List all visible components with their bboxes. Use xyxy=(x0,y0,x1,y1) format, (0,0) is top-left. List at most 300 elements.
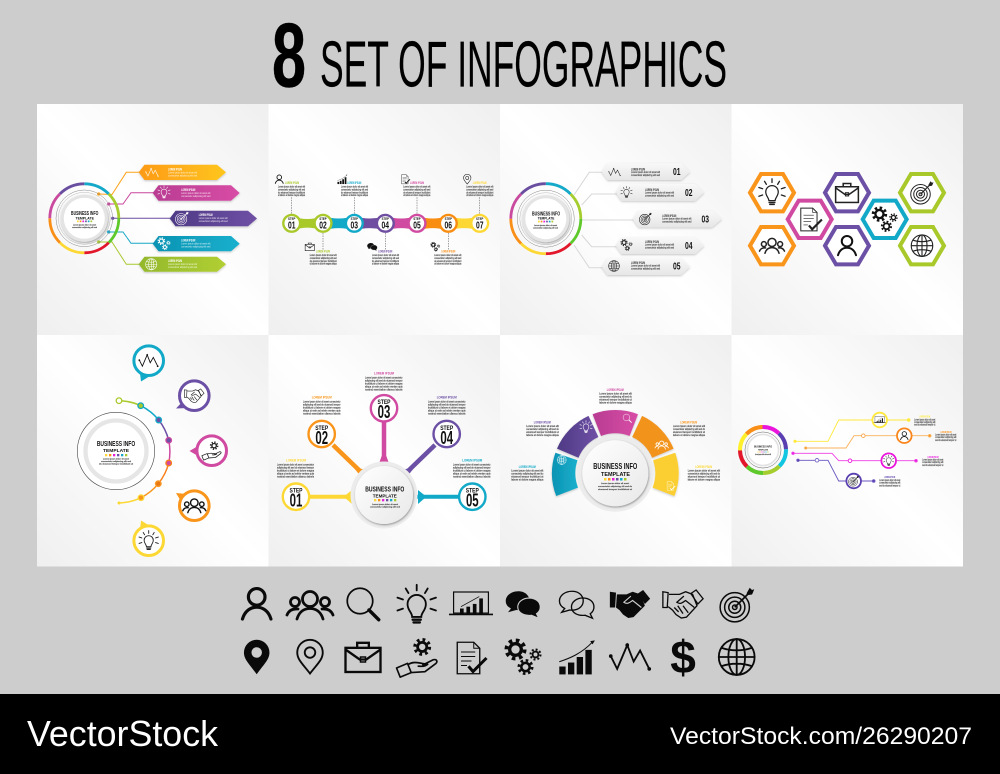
center circle: Lorem ipsum dolor sit amet xyxy=(103,458,129,460)
step 05 xyxy=(409,215,425,232)
text block: magenta: consectetur adipiscing elit xyxy=(922,460,943,464)
text block: purple: eiusmod tempor incididunt ut xyxy=(526,430,559,434)
text block: yellow: consectetur adipiscing elit xyxy=(914,420,935,424)
text block: orange xyxy=(935,431,956,442)
text block: step 01: LOREM IPSUM xyxy=(285,181,299,185)
text block: purple: sed do eiusmod tempor ut xyxy=(879,483,900,487)
text block: orange: labore et dolore magna aliqua xyxy=(673,433,705,437)
text block: purple: Lorem ipsum dolor sit amet xyxy=(879,478,900,482)
text block: step 06: LOREM IPSUM xyxy=(441,250,455,254)
text block: step 06: ut labore et dolore magna aliqua xyxy=(434,262,462,266)
icon: person xyxy=(242,589,271,619)
text block: step 02: LOREM IPSUM xyxy=(312,395,332,400)
center label: Lorem ipsum dolor sit amet xyxy=(534,224,557,227)
text block: purple: Lorem ipsum dolor sit amet elit xyxy=(526,424,559,428)
center label xyxy=(754,444,773,456)
hex: globe xyxy=(900,227,944,264)
node: purple target xyxy=(846,474,861,488)
text block: step 04: aliqua ut enim ad minim veniam quis xyxy=(428,409,466,413)
text block: magenta: sed do eiusmod tempor ut xyxy=(922,463,943,467)
bubble: hand gear xyxy=(190,436,226,466)
tag: orange: LOREM IPSUM xyxy=(168,168,182,172)
text block: step 01: nostrud exercitation ullamco laboris xyxy=(277,474,314,478)
icon: briefcase xyxy=(346,643,380,672)
step 02 xyxy=(308,421,335,448)
text block: step 02: Lorem ipsum dolor sit amet elit xyxy=(310,253,337,257)
tag: green: Lorem ipsum dolor sit amet elit xyxy=(168,262,197,266)
sector: magenta search xyxy=(593,410,638,436)
tag 04: LOREM IPSUM xyxy=(645,240,659,244)
text block: step 04: Lorem ipsum dolor sit amet consectetur xyxy=(428,400,466,404)
text block: step 06 xyxy=(431,242,462,266)
tag 05: consectetur adipiscing elit sed xyxy=(631,266,660,270)
text block: step 05: Lorem ipsum dolor sit amet elit xyxy=(403,184,430,188)
center circle: consectetur adipiscing elit sed xyxy=(101,460,131,463)
step 04: 04 xyxy=(382,221,389,232)
center label xyxy=(532,211,560,230)
tag 01: Lorem ipsum dolor sit amet elit xyxy=(631,170,660,174)
text block: orange: Lorem ipsum dolor sit amet elit xyxy=(673,424,705,428)
icon: handshake outline xyxy=(663,590,703,618)
text block: step 05: aliqua ut enim ad minim veniam quis xyxy=(453,472,491,476)
tag 01: consectetur adipiscing elit sed xyxy=(631,173,660,177)
center label: BUSINESS INFO xyxy=(532,211,560,217)
step 04 xyxy=(434,421,460,448)
center circle: TEMPLATE xyxy=(103,448,129,453)
node: magenta bulb xyxy=(881,453,896,468)
ring diagram xyxy=(740,427,786,473)
title xyxy=(272,6,727,106)
step 02: STEP xyxy=(315,425,329,432)
text block: yellow: labore et dolore magna aliqua xyxy=(688,478,720,482)
text block: step 03 xyxy=(337,175,368,197)
step 05: STEP xyxy=(413,216,421,221)
tag 02: LOREM IPSUM xyxy=(645,188,659,192)
bubble: people xyxy=(176,491,209,520)
dashed leader lines xyxy=(292,197,480,250)
text block: step 02: consectetur adipiscing elit sed xyxy=(310,256,337,260)
text block: step 04: LOREM IPSUM xyxy=(437,395,457,400)
center label: TEMPLATE xyxy=(538,216,554,220)
text block: step 07: do eiusmod tempor incididunt xyxy=(466,190,493,194)
text block: step 02: Lorem ipsum dolor sit amet consectetur xyxy=(303,400,340,404)
tag: orange: Lorem ipsum dolor sit amet elit xyxy=(168,170,197,174)
text block: step 02: LOREM IPSUM xyxy=(316,250,330,254)
text block: step 01: Lorem ipsum dolor sit amet elit xyxy=(278,184,305,188)
text block: magenta: Lorem ipsum dolor sit amet elit xyxy=(599,392,632,396)
panel: 1 colored arrow tags xyxy=(37,104,268,335)
center disc: BUSINESS INFO xyxy=(593,461,638,471)
text block: step 07: LOREM IPSUM xyxy=(473,181,487,185)
text block: purple xyxy=(526,420,559,437)
sector: yellow document xyxy=(653,453,679,496)
text block: orange: Lorem ipsum dolor sit amet xyxy=(935,432,956,436)
tag 04 xyxy=(616,237,704,254)
icon: document xyxy=(457,642,486,674)
icon: speech solid xyxy=(506,591,540,618)
text block: yellow xyxy=(688,465,720,482)
center label: BUSINESS INFO xyxy=(71,211,98,217)
step 06: 06 xyxy=(445,221,452,232)
tag: purple: Lorem ipsum dolor sit amet elit xyxy=(199,216,228,220)
text block: step 05: do eiusmod tempor incididunt xyxy=(403,190,430,194)
panel: 4 hexagon icons xyxy=(732,104,963,335)
step 03: 03 xyxy=(378,402,390,422)
center circle: BUSINESS INFO xyxy=(97,441,136,448)
text block: step 05: LOREM IPSUM xyxy=(462,458,483,463)
text block: step 05: Lorem ipsum dolor sit amet consectetur xyxy=(453,463,490,467)
text block: yellow: consectetur adipiscing elit sed do xyxy=(688,472,720,476)
center label: BUSINESS INFO xyxy=(754,444,773,448)
text block: purple xyxy=(879,476,900,487)
line: purple xyxy=(797,458,875,482)
tag 03: consectetur adipiscing elit sed xyxy=(662,220,692,224)
tag: cyan: LOREM IPSUM xyxy=(181,238,195,242)
text block: step 04: do eiusmod tempor incididunt xyxy=(372,259,399,263)
title: 8 xyxy=(272,6,306,106)
text block: yellow: Lorem ipsum dolor sit amet xyxy=(914,417,935,421)
tag 03: 03 xyxy=(702,214,709,225)
tag 03 xyxy=(633,211,722,227)
center disc xyxy=(577,435,654,512)
footer url: VectorStock.com/26290207 xyxy=(670,723,972,750)
center disc: Lorem ipsum dolor sit amet xyxy=(372,503,398,506)
step 05: STEP xyxy=(466,488,479,494)
step 07: STEP xyxy=(476,216,484,221)
text block: step 01: do eiusmod tempor incididunt xyxy=(278,190,305,194)
step 01: STEP xyxy=(290,488,303,494)
tag: magenta: LOREM IPSUM xyxy=(181,188,195,192)
tag 01: LOREM IPSUM xyxy=(631,167,645,171)
node: orange person xyxy=(897,428,912,443)
center circle: do eiusmod tempor incididunt ut xyxy=(99,462,134,466)
icon: handshake solid xyxy=(610,590,650,618)
tag: green xyxy=(139,257,226,272)
text block: step 06: consectetur adipiscing elit sed xyxy=(434,256,462,260)
tag 05 xyxy=(602,258,690,275)
text block: step 02: adipiscing elit sed do eiusmod tempor xyxy=(303,403,340,407)
icon: target xyxy=(720,588,754,622)
step 02: STEP xyxy=(319,216,327,221)
center disc: Lorem ipsum dolor sit amet xyxy=(601,482,630,485)
icon: pin solid xyxy=(244,640,269,674)
tag: cyan: Lorem ipsum dolor sit amet elit xyxy=(181,242,211,246)
tag 03: LOREM IPSUM xyxy=(662,214,676,218)
line: magenta xyxy=(792,452,917,463)
text block: step 04 xyxy=(428,395,466,416)
text block: step 04: ut labore et dolore magna aliqua xyxy=(372,262,399,266)
text block: yellow: eiusmod tempor incididunt ut xyxy=(688,474,720,478)
step 01: 01 xyxy=(290,490,302,510)
text block: step 04 xyxy=(367,243,399,266)
center disc: TEMPLATE xyxy=(601,472,630,478)
text block: step 01: Lorem ipsum dolor sit amet consectetur xyxy=(277,463,314,467)
text block: step 05: nostrud exercitation ullamco laboris xyxy=(453,474,491,478)
text block: step 05: consectetur adipiscing elit sed xyxy=(403,188,431,192)
step 01: 01 xyxy=(288,221,296,232)
step 05 xyxy=(459,484,485,510)
icon: people xyxy=(287,592,333,619)
footer logo: VectorStock xyxy=(27,713,219,754)
step 04 xyxy=(377,215,394,232)
icon: zigzag line xyxy=(609,643,651,671)
text block: magenta xyxy=(599,388,632,404)
text block: step 01 xyxy=(277,458,314,478)
text block: step 04: consectetur adipiscing elit sed xyxy=(372,256,399,260)
center label: Lorem ipsum dolor sit amet xyxy=(73,224,96,226)
text block: magenta: consectetur adipiscing elit sed do xyxy=(599,394,632,398)
step 01 xyxy=(283,484,309,510)
text block: step 02 xyxy=(305,243,337,266)
text block: step 01: ut labore et dolore magna aliqua xyxy=(278,193,305,197)
tag: magenta: Lorem ipsum dolor sit amet elit xyxy=(181,191,211,195)
tag 05: Lorem ipsum dolor sit amet elit xyxy=(631,264,660,268)
text block: yellow: LOREM IPSUM xyxy=(695,465,712,469)
center disc: eiusmod tempor incididunt ut xyxy=(598,488,633,491)
icon: laptop chart xyxy=(449,592,493,614)
tag 02: Lorem ipsum dolor sit amet elit xyxy=(645,191,674,195)
text block: step 04: adipiscing elit sed do eiusmod tempor xyxy=(428,403,466,407)
panel: 6 five step radial xyxy=(268,335,500,566)
center label: TEMPLATE xyxy=(76,216,94,220)
step 02 xyxy=(315,215,331,232)
sector: cyan globe xyxy=(552,453,578,496)
bubble: zigzag xyxy=(134,346,164,382)
text block: orange: LOREM IPSUM xyxy=(940,431,952,434)
tag 01: 01 xyxy=(673,167,681,178)
tag: cyan: consectetur adipiscing elit sed xyxy=(181,244,211,248)
tag: purple: LOREM IPSUM xyxy=(199,213,213,217)
tag: orange: consectetur adipiscing elit sed xyxy=(168,174,197,178)
step 04: STEP xyxy=(440,425,454,432)
text block: cyan: Lorem ipsum dolor sit amet elit xyxy=(511,468,543,472)
text block: step 02: do eiusmod tempor incididunt xyxy=(310,259,337,263)
icon row 2 xyxy=(244,631,755,683)
step 01: STEP xyxy=(288,216,296,221)
tag: orange xyxy=(139,165,226,180)
ring diagram xyxy=(511,184,581,254)
text block: orange: consectetur adipiscing elit xyxy=(935,435,956,439)
tag 05: LOREM IPSUM xyxy=(631,261,645,265)
text block: magenta: LOREM IPSUM xyxy=(607,388,624,392)
center label: consectetur adipiscing elit sed xyxy=(533,226,558,230)
center disc: TEMPLATE xyxy=(373,493,397,498)
tag 02: consectetur adipiscing elit sed xyxy=(645,194,674,198)
icon: growth chart xyxy=(559,640,595,674)
text block: yellow: sed do eiusmod tempor ut xyxy=(914,423,935,427)
text block: step 05: adipiscing elit sed do eiusmod tempor xyxy=(453,466,490,470)
hex: briefcase xyxy=(825,174,869,211)
text block: yellow: Lorem ipsum dolor sit amet elit xyxy=(688,468,720,472)
text block: step 06: do eiusmod tempor incididunt xyxy=(434,259,461,263)
text block: step 03 xyxy=(365,370,403,392)
tag: purple xyxy=(170,211,257,226)
text block: orange: LOREM IPSUM xyxy=(680,420,697,424)
text block: magenta: labore et dolore magna aliqua xyxy=(599,400,632,404)
text block: purple: LOREM IPSUM xyxy=(884,476,895,479)
bubble: bulb xyxy=(134,520,164,556)
tag 02 xyxy=(616,184,704,201)
timeline links xyxy=(292,216,480,231)
icon: light bulb xyxy=(397,585,436,622)
tag: magenta xyxy=(153,185,240,201)
text block: step 01: LOREM IPSUM xyxy=(286,458,306,463)
text block: purple: labore et dolore magna aliqua xyxy=(526,433,559,437)
step 05: 05 xyxy=(466,490,479,510)
text block: step 03: Lorem ipsum dolor sit amet elit xyxy=(341,184,368,188)
text block: step 03: Lorem ipsum dolor sit amet consectetur xyxy=(365,376,402,380)
hex: gears xyxy=(863,201,907,238)
icon: gears xyxy=(506,640,540,674)
text block: cyan: eiusmod tempor incididunt ut xyxy=(511,474,543,478)
text block: step 07: ut labore et dolore magna aliqua xyxy=(466,193,494,197)
text block: step 01: aliqua ut enim ad minim veniam quis xyxy=(277,472,314,476)
text block: step 03: LOREM IPSUM xyxy=(374,370,394,376)
text block: step 02: incididunt ut labore et dolore magna xyxy=(303,406,341,410)
icon: globe xyxy=(719,639,755,675)
text block: orange: consectetur adipiscing elit sed do xyxy=(673,427,705,431)
tag: green: consectetur adipiscing elit sed xyxy=(168,265,197,269)
text block: magenta: Lorem ipsum dolor sit amet xyxy=(922,458,943,462)
tag 01 xyxy=(602,163,690,180)
text block: orange: eiusmod tempor incididunt ut xyxy=(673,430,705,434)
tag 02: 02 xyxy=(685,188,693,199)
text block: step 02: nostrud exercitation ullamco laboris xyxy=(303,412,341,416)
center label: TEMPLATE xyxy=(758,448,768,452)
center disc xyxy=(350,462,418,528)
center label xyxy=(71,211,98,229)
text block: step 05: LOREM IPSUM xyxy=(410,181,424,185)
icon row 1 xyxy=(242,585,754,622)
step 03: 03 xyxy=(351,221,358,232)
tag 04: Lorem ipsum dolor sit amet elit xyxy=(645,243,674,247)
line: yellow xyxy=(794,419,910,442)
tag: magenta: consectetur adipiscing elit sed xyxy=(181,194,211,198)
text block: magenta: LOREM IPSUM xyxy=(928,456,938,459)
tag: purple: consectetur adipiscing elit sed xyxy=(199,219,228,223)
text block: step 04: Lorem ipsum dolor sit amet elit xyxy=(372,253,399,257)
center label: consectetur adipiscing elit sed xyxy=(72,226,97,229)
step 03: STEP xyxy=(378,399,391,406)
text block: cyan xyxy=(511,465,544,482)
text block: step 07 xyxy=(464,174,494,197)
sector: purple bulb xyxy=(557,416,598,458)
panel: 3 grey numbered tags xyxy=(500,104,732,335)
step 03 xyxy=(346,215,363,232)
text block: step 01: consectetur adipiscing elit sed xyxy=(278,188,305,192)
footer bar xyxy=(0,694,1000,774)
icon: magnifier xyxy=(347,588,379,620)
step 07: 07 xyxy=(476,221,484,232)
dotted arc xyxy=(116,398,172,504)
center label: Lorem ipsum dolor sit amet elit xyxy=(755,453,771,456)
hex: people xyxy=(750,227,794,264)
text block: magenta xyxy=(922,456,943,467)
step 03: STEP xyxy=(351,216,358,221)
step 07 xyxy=(471,215,488,232)
connector lines xyxy=(97,172,171,264)
text block: step 07: consectetur adipiscing elit sed xyxy=(466,188,494,192)
node: yellow laptop xyxy=(872,413,887,427)
text block: orange: sed do eiusmod tempor ut xyxy=(935,438,956,442)
text block: step 03: incididunt ut labore et dolore magna xyxy=(365,382,403,386)
panel: 7 semicircle sectors xyxy=(500,335,732,566)
line: orange xyxy=(805,434,931,449)
panel: 5 speech bubbles around circle xyxy=(37,335,268,566)
icon: dollar: $ xyxy=(670,631,696,683)
text block: step 04: nostrud exercitation ullamco laboris xyxy=(428,412,466,416)
text block: step 03: do eiusmod tempor incididunt xyxy=(341,190,368,194)
center circle xyxy=(77,412,155,490)
step 04: STEP xyxy=(382,216,389,221)
text block: step 05 xyxy=(453,458,491,478)
text block: step 03: adipiscing elit sed do eiusmod tempor xyxy=(365,379,402,383)
center disc: consectetur adipiscing elit sed do xyxy=(598,485,633,488)
tag 05: 05 xyxy=(673,262,681,272)
text block: magenta: eiusmod tempor incididunt ut xyxy=(599,398,632,402)
text block: cyan: consectetur adipiscing elit sed do xyxy=(511,472,544,476)
text block: step 06: Lorem ipsum dolor sit amet elit xyxy=(434,253,461,257)
ring diagram xyxy=(50,184,119,253)
text block: cyan: LOREM IPSUM xyxy=(519,465,536,469)
step 05: 05 xyxy=(413,221,421,232)
text block: step 03: consectetur adipiscing elit sed xyxy=(341,188,368,192)
tag 04: consectetur adipiscing elit sed xyxy=(645,246,674,250)
bubble: handshake xyxy=(176,381,209,411)
hex: bulb xyxy=(750,174,794,211)
step 02: 02 xyxy=(315,428,328,448)
text block: step 07: Lorem ipsum dolor sit amet elit xyxy=(466,184,493,188)
text block: step 03: ut labore et dolore magna aliqua xyxy=(341,193,368,197)
text block: step 02 xyxy=(303,395,341,416)
step 04: 04 xyxy=(440,428,453,448)
text block: step 05: ut labore et dolore magna aliqua xyxy=(403,193,431,197)
tag: cyan xyxy=(153,236,240,251)
panel: 2 seven step timeline xyxy=(268,104,500,335)
step 03 xyxy=(371,395,397,422)
text block: step 03: LOREM IPSUM xyxy=(347,181,361,185)
icon: speech outline xyxy=(559,591,594,618)
center disc: BUSINESS INFO xyxy=(365,484,404,494)
text block: step 01 xyxy=(275,175,305,197)
text block: step 02: ut labore et dolore magna aliqua xyxy=(310,262,337,266)
stems xyxy=(309,421,459,504)
text block: step 04: incididunt ut labore et dolore magna xyxy=(428,406,466,410)
tag 04: 04 xyxy=(685,241,693,252)
text block: step 03: aliqua ut enim ad minim veniam quis xyxy=(365,385,403,389)
text block: step 05 xyxy=(402,175,431,197)
step 02: 02 xyxy=(319,221,327,232)
text block: step 01: adipiscing elit sed do eiusmod tempor xyxy=(277,466,314,470)
text block: step 03: nostrud exercitation ullamco laboris xyxy=(365,388,403,392)
step 06: STEP xyxy=(445,216,452,221)
text block: purple: LOREM IPSUM xyxy=(534,420,551,424)
sector: orange people xyxy=(632,416,674,458)
text block: purple: consectetur adipiscing elit sed do xyxy=(526,427,559,431)
tag: green: LOREM IPSUM xyxy=(168,259,182,263)
text block: step 04: LOREM IPSUM xyxy=(378,250,392,254)
hex: target xyxy=(900,174,944,211)
icon: pin outline xyxy=(297,640,323,674)
connector lines xyxy=(574,172,634,268)
center disc: consectetur adipiscing elit sed xyxy=(370,506,400,508)
text block: cyan: labore et dolore magna aliqua xyxy=(511,478,544,482)
text block: yellow: LOREM IPSUM xyxy=(919,415,930,418)
step 01 xyxy=(283,215,300,232)
text block: step 02: aliqua ut enim ad minim veniam quis xyxy=(303,409,341,413)
text block: yellow xyxy=(914,415,935,427)
text block: orange xyxy=(673,420,705,437)
